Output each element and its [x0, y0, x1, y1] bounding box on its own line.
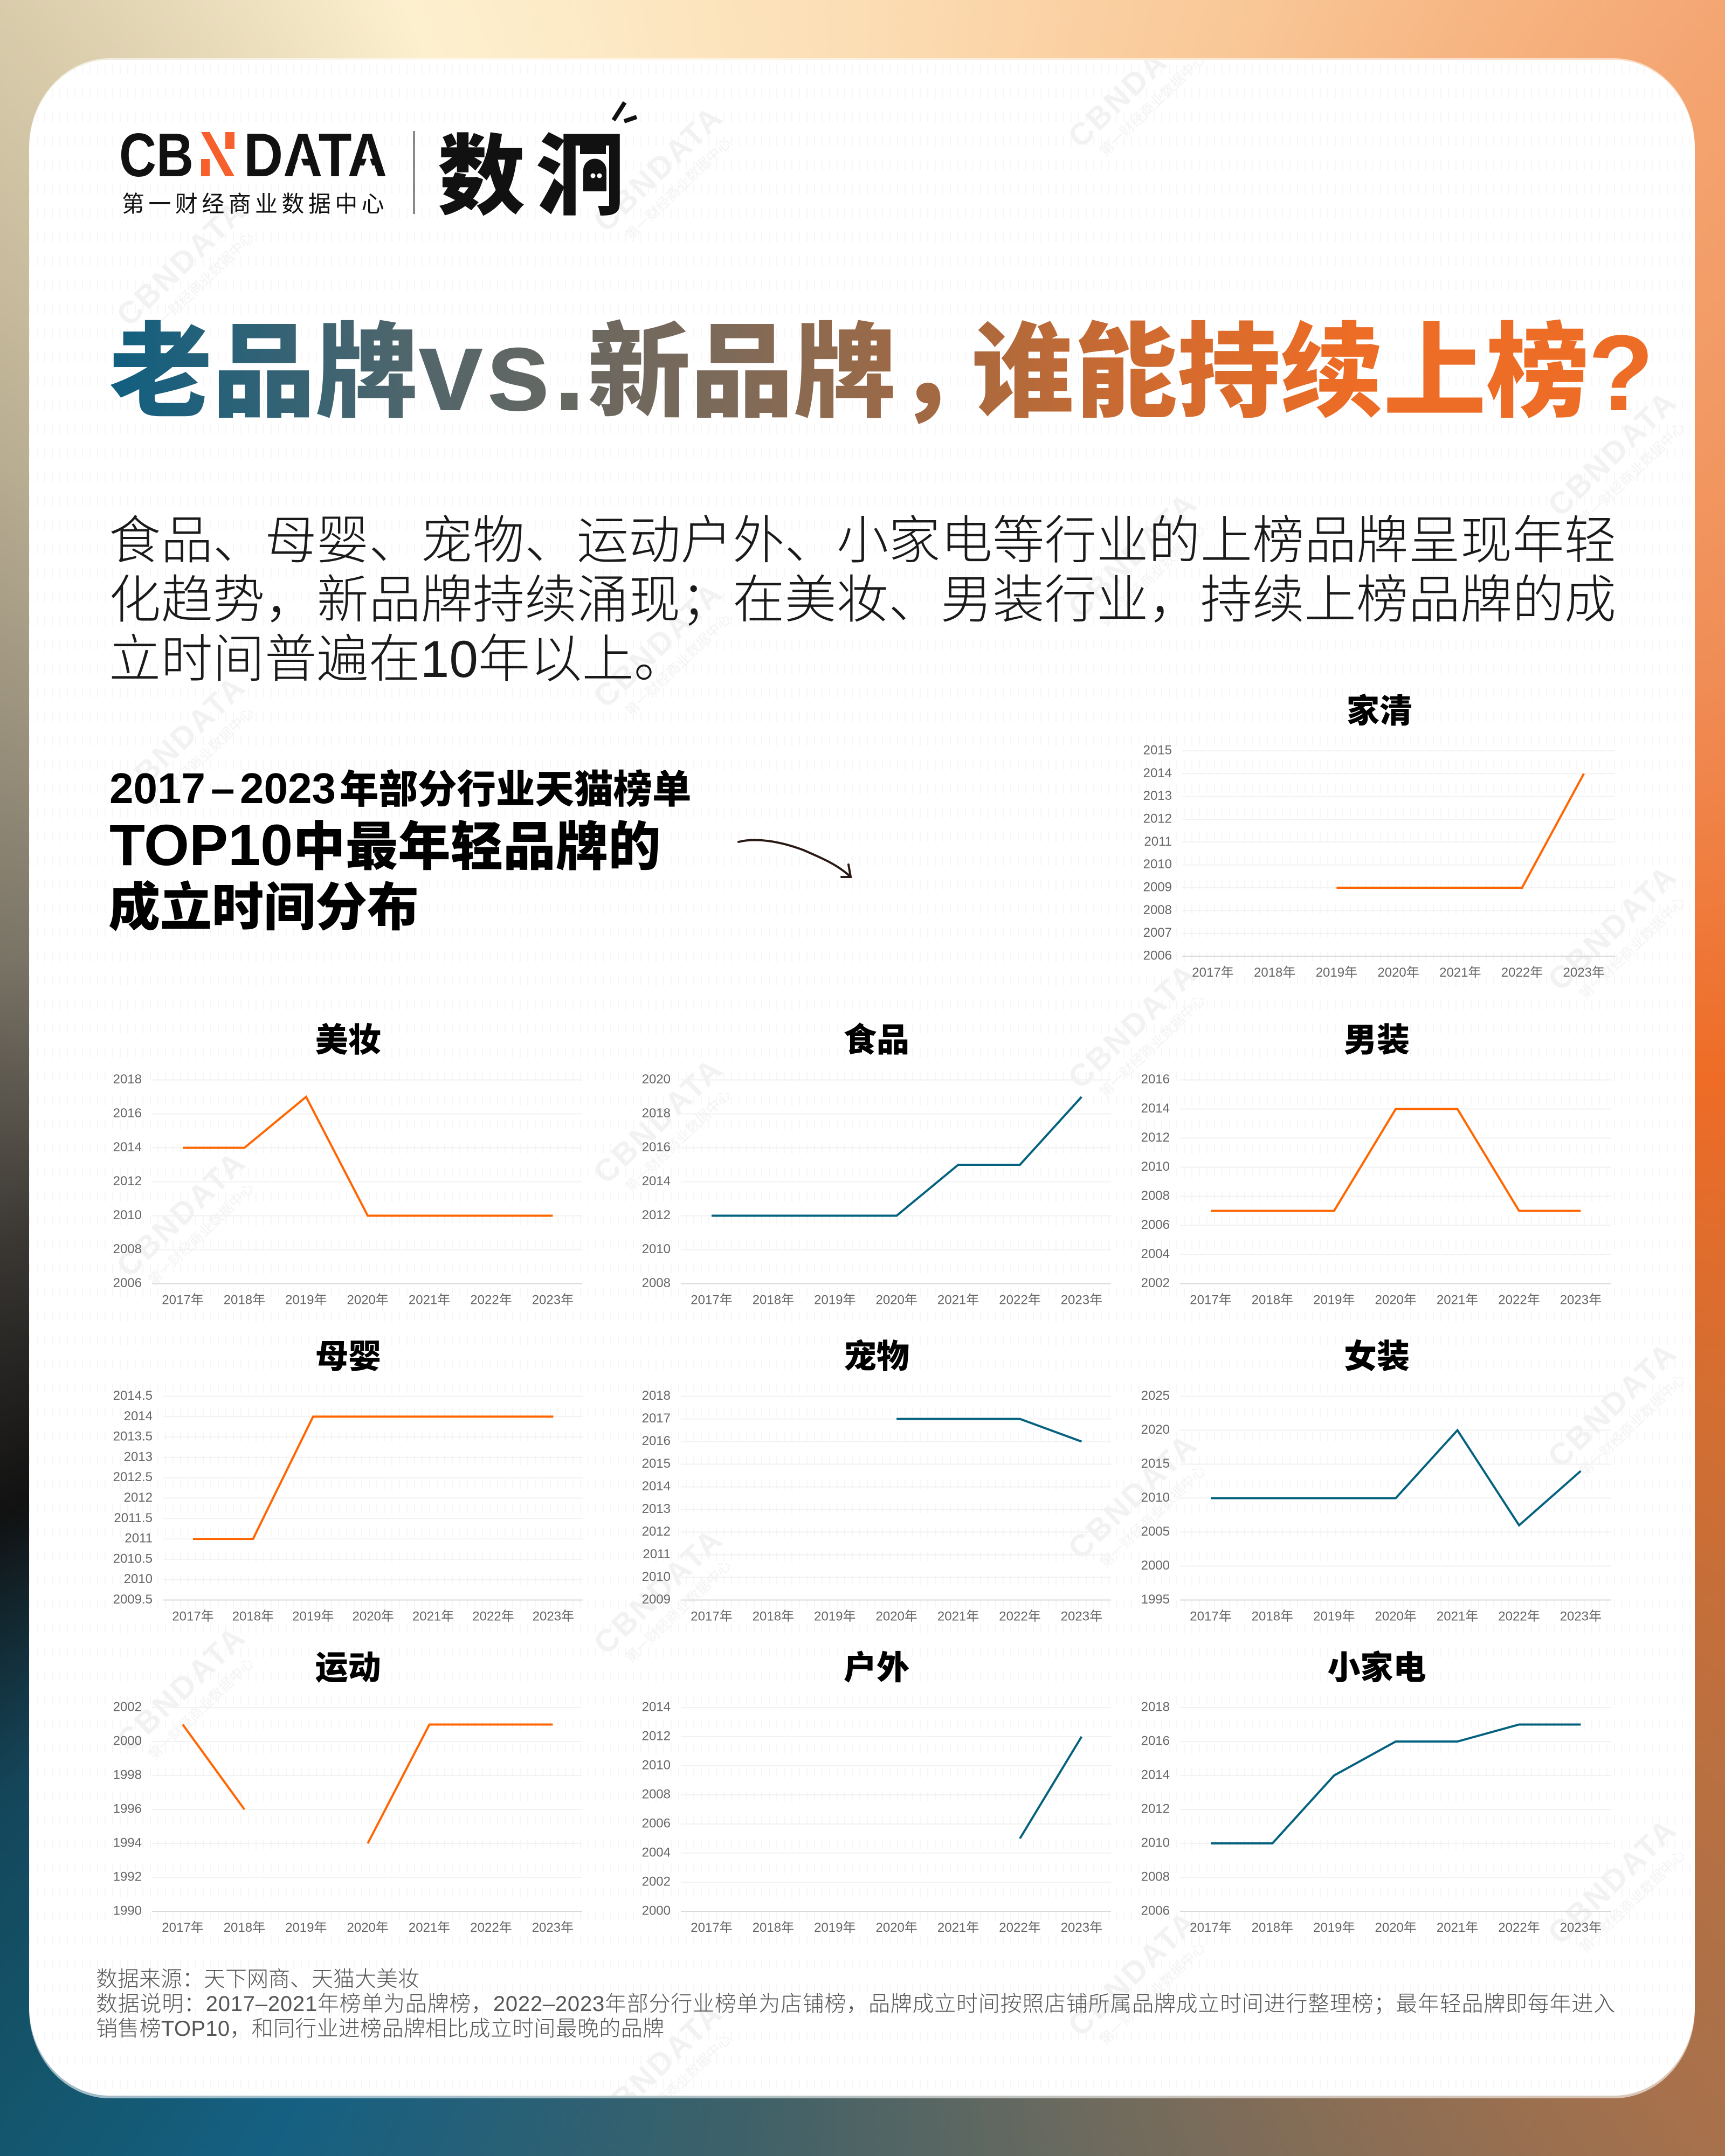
watermarks: 第一财经商业数据中心: [145, 229, 257, 338]
y axis labels: 2020: [642, 1072, 671, 1087]
x axis labels: 2019年: [285, 1920, 327, 1935]
x axis labels: 2019年: [285, 1293, 327, 1308]
y axis labels: 2010: [124, 1572, 153, 1586]
y axis labels: 2010: [642, 1570, 671, 1584]
y axis labels: [1143, 743, 1172, 963]
icon: ghost in doorway: [578, 146, 609, 206]
footnote: source and notes: 数据来源：天下网商、天猫大美妆: [96, 1967, 419, 1991]
y axis labels: 1998: [113, 1768, 142, 1782]
x axis labels: [691, 1293, 1102, 1308]
y axis labels: 2018: [1141, 1700, 1170, 1714]
y axis labels: 2009: [1143, 880, 1172, 895]
watermarks: CBNDATA: [1541, 1811, 1684, 1951]
x axis labels: 2019年: [1313, 1920, 1355, 1935]
y axis labels: [1141, 1700, 1170, 1918]
x axis labels: 2020年: [1375, 1920, 1417, 1935]
x axis labels: 2019年: [1313, 1609, 1355, 1623]
watermarks: 第一财经商业数据中心: [145, 1655, 257, 1764]
y axis labels: [642, 1072, 671, 1290]
x axis labels: 2020年: [1377, 965, 1419, 980]
x axis labels: 2023年: [1061, 1293, 1102, 1308]
icon: spark ticks: [613, 102, 637, 121]
x axis labels: 2017年: [691, 1920, 733, 1935]
section heading: –: [211, 764, 235, 812]
x axis labels: 2018年: [1252, 1293, 1293, 1308]
x axis labels: 2022年: [1498, 1920, 1540, 1935]
logo: 数洞: 洞: [536, 127, 625, 226]
x axis labels: 2021年: [1439, 965, 1481, 980]
x axis labels: 2019年: [1313, 1293, 1355, 1308]
watermarks: CBNDATA: [1061, 15, 1204, 155]
watermarks: CBNDATA: [1061, 485, 1204, 625]
y axis labels: 2018: [642, 1388, 671, 1403]
x axis labels: 2018年: [224, 1293, 265, 1308]
x axis labels: 2022年: [999, 1920, 1041, 1935]
y axis labels: 2012: [642, 1524, 671, 1539]
data line: [183, 1725, 553, 1843]
watermarks: CBNDATA: [110, 193, 253, 333]
y axis labels: 2014: [642, 1479, 671, 1494]
x axis labels: 2017年: [172, 1609, 214, 1623]
chart title: 家清: [1347, 693, 1412, 729]
x axis labels: 2023年: [1560, 1920, 1602, 1935]
y axis labels: [113, 1388, 153, 1607]
x axis labels: 2018年: [224, 1920, 265, 1935]
x axis labels: [1190, 1920, 1602, 1935]
watermarks: 第一财经商业数据中心: [145, 1180, 257, 1289]
intro paragraph: 食品、母婴、宠物、运动户外、小家电等行业的上榜品牌呈现年轻: [109, 512, 1616, 570]
y axis labels: [642, 1700, 671, 1918]
logo: CBNDATA with tagline: DATA: [244, 121, 387, 190]
y axis labels: 2013: [642, 1502, 671, 1516]
y axis labels: 2011: [1144, 834, 1172, 849]
x axis labels: [162, 1920, 574, 1935]
y axis labels: 2014: [1141, 1101, 1170, 1116]
title: 老品牌: [109, 315, 418, 430]
chart: 美妆: [113, 1022, 582, 1308]
data line: [193, 1416, 553, 1539]
title: vs.: [418, 305, 588, 435]
chart: 运动: [113, 1649, 582, 1935]
section heading: 2017: [109, 764, 205, 812]
y axis labels: 2007: [1143, 925, 1172, 940]
watermarks: 第一财经商业数据中心: [1096, 1462, 1209, 1571]
x axis labels: 2018年: [1252, 1920, 1293, 1935]
watermarks: 第一财经商业数据中心: [1096, 521, 1209, 630]
x axis labels: [172, 1609, 574, 1623]
chart title: 母婴: [315, 1338, 381, 1374]
y axis labels: 2014: [124, 1409, 153, 1423]
y axis labels: [1141, 1072, 1170, 1290]
watermarks: CBNDATA: [1061, 956, 1204, 1096]
watermarks: CBNDATA: [1061, 1903, 1204, 2043]
watermarks: CBNDATA: [587, 1051, 730, 1191]
logo: 数洞: [438, 102, 637, 226]
y axis labels: 2008: [1141, 1869, 1170, 1884]
watermarks: 第一财经商业数据中心: [622, 611, 734, 720]
x axis labels: 2022年: [999, 1293, 1041, 1308]
chart title: 美妆: [315, 1022, 381, 1059]
x axis labels: 2018年: [753, 1920, 794, 1935]
x axis labels: 2022年: [472, 1609, 514, 1623]
x axis labels: 2021年: [409, 1920, 450, 1935]
y axis labels: 2002: [642, 1875, 671, 1889]
watermarks: 第一财经商业数据中心: [1096, 51, 1209, 160]
watermarks: CBNDATA: [110, 1144, 253, 1284]
watermarks: CBNDATA: [587, 1995, 730, 2135]
y axis labels: 2009: [642, 1592, 671, 1607]
x axis labels: 2020年: [1375, 1293, 1417, 1308]
watermarks: 第一财经商业数据中心: [1576, 1371, 1688, 1480]
y axis labels: 1995: [1141, 1592, 1170, 1607]
x axis labels: 2017年: [1190, 1920, 1232, 1935]
chart: 小家电: [1141, 1649, 1611, 1935]
chart: 食品: [642, 1022, 1111, 1308]
y axis labels: 2014: [642, 1700, 671, 1714]
watermarks: CBNDATA: [587, 575, 730, 715]
y axis labels: [113, 1072, 142, 1290]
y axis labels: 1992: [113, 1869, 142, 1884]
x axis labels: 2017年: [162, 1293, 204, 1308]
y axis labels: 2020: [1141, 1422, 1170, 1437]
x axis labels: 2023年: [1061, 1920, 1102, 1935]
title: 新品牌: [588, 315, 896, 430]
x axis labels: 2019年: [814, 1609, 855, 1623]
logo: CBNDATA with tagline: CB: [119, 121, 194, 190]
x axis labels: 2021年: [937, 1293, 979, 1308]
x axis labels: 2020年: [347, 1920, 389, 1935]
chart title: 食品: [844, 1022, 909, 1059]
y axis labels: [113, 1700, 142, 1918]
watermarks: CBNDATA: [1541, 858, 1684, 998]
y axis labels: 2010: [1141, 1159, 1170, 1174]
y axis labels: 1994: [113, 1836, 142, 1850]
title: ?: [1588, 313, 1654, 433]
x axis labels: 2021年: [1437, 1920, 1478, 1935]
y axis labels: 2011.5: [114, 1511, 153, 1525]
logo divider: [413, 131, 415, 214]
y axis labels: 2006: [113, 1276, 142, 1290]
x axis labels: 2017年: [1192, 965, 1234, 980]
watermarks: 第一财经商业数据中心: [1096, 1939, 1209, 2048]
y axis labels: 2014: [642, 1174, 671, 1188]
y axis labels: 2010: [1143, 857, 1172, 872]
watermarks: CBNDATA: [1541, 1335, 1684, 1475]
y axis labels: 2010: [642, 1758, 671, 1772]
x axis labels: 2020年: [876, 1920, 917, 1935]
x axis labels: 2018年: [1252, 1609, 1293, 1623]
y axis labels: 2006: [1141, 1218, 1170, 1232]
x axis labels: 2023年: [532, 1920, 574, 1935]
watermarks: CBNDATA: [1541, 383, 1684, 523]
y axis labels: 2015: [642, 1456, 671, 1471]
x axis labels: 2020年: [347, 1293, 389, 1308]
data line: [183, 1097, 553, 1216]
x axis labels: [1192, 965, 1605, 980]
chart title: 女装: [1344, 1338, 1410, 1374]
x axis labels: 2017年: [691, 1609, 733, 1623]
chart title: 运动: [315, 1649, 381, 1686]
x axis labels: 2017年: [1190, 1609, 1232, 1623]
y axis labels: 2006: [1143, 949, 1172, 963]
chart title: 男装: [1344, 1022, 1410, 1059]
intro paragraph: 化趋势，新品牌持续涌现；在美妆、男装行业，持续上榜品牌的成: [109, 571, 1616, 629]
x axis labels: 2017年: [162, 1920, 204, 1935]
x axis labels: 2019年: [814, 1293, 855, 1308]
x axis labels: 2017年: [691, 1293, 733, 1308]
logo: CBNDATA with tagline: 第一财经商业数据中心: [122, 191, 388, 217]
y axis labels: 2010: [113, 1208, 142, 1222]
y axis labels: 2010.5: [113, 1551, 153, 1566]
y axis labels: 2016: [113, 1106, 142, 1121]
x axis labels: 2023年: [532, 1293, 574, 1308]
footnote: source and notes: 销售榜TOP10，和同行业进榜品牌相比成立时间最晚的品牌: [96, 2017, 664, 2041]
y axis labels: 2004: [642, 1846, 671, 1860]
x axis labels: 2021年: [1437, 1293, 1478, 1308]
y axis labels: 2010: [1141, 1836, 1170, 1850]
chart title: 小家电: [1327, 1649, 1426, 1686]
y axis labels: 1990: [113, 1904, 142, 1918]
x axis labels: 2019年: [1316, 965, 1357, 980]
x axis labels: 2018年: [753, 1609, 794, 1623]
y axis labels: 2005: [1141, 1524, 1170, 1539]
y axis labels: 2017: [642, 1411, 671, 1426]
x axis labels: [1190, 1609, 1602, 1623]
watermarks: 第一财经商业数据中心: [145, 704, 257, 813]
intro paragraph: [109, 512, 1616, 688]
y axis labels: 2016: [642, 1140, 671, 1155]
x axis labels: [1190, 1293, 1602, 1308]
section heading: 2023: [240, 764, 336, 812]
data line: [1336, 773, 1584, 888]
chart title: 宠物: [844, 1338, 909, 1374]
x axis labels: 2022年: [470, 1920, 512, 1935]
data line: [1211, 1725, 1581, 1843]
y axis labels: 2010: [1141, 1490, 1170, 1505]
x axis labels: 2020年: [353, 1609, 394, 1623]
data line: [896, 1419, 1081, 1441]
arrow: [739, 840, 851, 877]
section heading: TOP10中最年轻品牌的: [109, 812, 661, 877]
y axis labels: 2008: [642, 1276, 671, 1290]
y axis labels: 2012: [1141, 1130, 1170, 1145]
y axis labels: 2008: [1143, 903, 1172, 917]
y axis labels: 2006: [642, 1816, 671, 1830]
y axis labels: 2008: [1141, 1188, 1170, 1203]
y axis labels: 2000: [1141, 1558, 1170, 1573]
x axis labels: 2022年: [470, 1293, 512, 1308]
y axis labels: [642, 1388, 671, 1607]
watermarks: CBNDATA: [110, 668, 253, 808]
x axis labels: 2023年: [1560, 1609, 1602, 1623]
x axis labels: 2023年: [1563, 965, 1605, 980]
y axis labels: 2014: [1143, 766, 1172, 780]
x axis labels: 2021年: [409, 1293, 450, 1308]
y axis labels: 2004: [1141, 1247, 1170, 1261]
intro paragraph: 立时间普遍在10年以上。: [109, 631, 686, 688]
section heading: [108, 764, 691, 937]
data line: [712, 1097, 1081, 1216]
section heading: 成立时间分布: [108, 879, 419, 937]
y axis labels: [1141, 1388, 1170, 1607]
x axis labels: 2020年: [876, 1609, 917, 1623]
watermarks: CBNDATA: [1061, 1426, 1204, 1566]
y axis labels: 2002: [1141, 1276, 1170, 1290]
watermarks: 第一财经商业数据中心: [622, 135, 734, 244]
x axis labels: [691, 1920, 1102, 1935]
x axis labels: 2021年: [937, 1920, 979, 1935]
icon: orange N mark: [201, 132, 234, 176]
x axis labels: 2020年: [1375, 1609, 1417, 1623]
y axis labels: 2011: [125, 1531, 153, 1546]
y axis labels: 2012.5: [113, 1470, 153, 1484]
x axis labels: 2018年: [753, 1293, 794, 1308]
y axis labels: 2002: [113, 1700, 142, 1714]
y axis labels: 2014: [113, 1140, 142, 1155]
y axis labels: 2012: [642, 1729, 671, 1743]
y axis labels: 2000: [113, 1733, 142, 1749]
watermarks: 第一财经商业数据中心: [622, 1087, 734, 1196]
x axis labels: 2022年: [1498, 1293, 1540, 1308]
logo: CBNDATA with tagline: [119, 121, 388, 217]
y axis labels: 2013: [124, 1449, 153, 1464]
x axis labels: 2021年: [1437, 1609, 1478, 1623]
x axis labels: 2020年: [876, 1293, 917, 1308]
watermarks: CBNDATA: [110, 1619, 253, 1759]
chart: 家清: [1143, 693, 1615, 980]
data line: [1211, 1431, 1581, 1525]
x axis labels: [691, 1609, 1102, 1623]
y axis labels: 2012: [124, 1490, 153, 1505]
footnote: source and notes: [96, 1967, 1615, 2041]
y axis labels: 2014.5: [113, 1388, 153, 1403]
footnote: source and notes: 数据说明：2017–2021年榜单为品牌榜，2022–2023年部分行业榜单为店铺榜，品牌成立时间按照店铺所属品牌成立时间进行整理榜；最年轻品牌即每年进入: [96, 1992, 1615, 2016]
x axis labels: 2019年: [292, 1609, 334, 1623]
x axis labels: 2023年: [533, 1609, 574, 1623]
y axis labels: 2008: [642, 1787, 671, 1801]
x axis labels: 2018年: [232, 1609, 274, 1623]
x axis labels: 2022年: [999, 1609, 1041, 1623]
y axis labels: 2010: [642, 1242, 671, 1256]
title: ，: [896, 315, 999, 430]
y axis labels: 2018: [642, 1106, 671, 1121]
watermarks: CBNDATA: [587, 1521, 730, 1661]
logo: 数洞: 数: [438, 128, 525, 226]
y axis labels: 2015: [1143, 743, 1172, 758]
watermarks: 第一财经商业数据中心: [1576, 894, 1688, 1003]
y axis labels: 2014: [1141, 1768, 1170, 1782]
section heading: 年部分行业天猫榜单: [340, 768, 691, 812]
x axis labels: 2021年: [412, 1609, 454, 1623]
y axis labels: 2009.5: [113, 1592, 153, 1607]
x axis labels: 2022年: [1501, 965, 1543, 980]
watermarks: 第一财经商业数据中心: [1096, 992, 1209, 1101]
chart: 宠物: [642, 1338, 1111, 1623]
y axis labels: 2012: [113, 1174, 142, 1188]
y axis labels: 2008: [113, 1242, 142, 1256]
x axis labels: 2017年: [1190, 1293, 1232, 1308]
y axis labels: 2025: [1141, 1388, 1170, 1403]
y axis labels: 2016: [642, 1434, 671, 1448]
x axis labels: 2018年: [1254, 965, 1295, 980]
x axis labels: 2022年: [1498, 1609, 1540, 1623]
y axis labels: 2016: [1141, 1072, 1170, 1087]
y axis labels: 2006: [1141, 1904, 1170, 1918]
watermarks: CBNDATA: [587, 99, 730, 239]
x axis labels: [162, 1293, 574, 1308]
data line: [1020, 1737, 1081, 1839]
watermarks: 第一财经商业数据中心: [622, 2031, 734, 2140]
x axis labels: 2023年: [1061, 1609, 1102, 1623]
y axis labels: 2000: [642, 1904, 671, 1918]
x axis labels: 2023年: [1560, 1293, 1602, 1308]
chart: 女装: [1141, 1338, 1611, 1623]
y axis labels: 2011: [643, 1547, 671, 1561]
y axis labels: 2013.5: [113, 1429, 153, 1444]
y axis labels: 2015: [1141, 1456, 1170, 1471]
data line: [1211, 1109, 1581, 1211]
watermarks: 第一财经商业数据中心: [1576, 419, 1688, 528]
watermarks: 第一财经商业数据中心: [1576, 1847, 1688, 1956]
y axis labels: 2018: [113, 1072, 142, 1087]
chart: 男装: [1141, 1022, 1611, 1308]
y axis labels: 2013: [1143, 789, 1172, 803]
y axis labels: 2016: [1141, 1733, 1170, 1749]
y axis labels: 1996: [113, 1801, 142, 1816]
y axis labels: 2012: [642, 1208, 671, 1222]
chart: 母婴: [113, 1338, 583, 1623]
y axis labels: 2012: [1143, 812, 1172, 826]
title: 谁能持续上榜: [971, 315, 1589, 430]
watermarks: 第一财经商业数据中心: [622, 1557, 734, 1666]
chart: 户外: [642, 1649, 1111, 1935]
x axis labels: 2021年: [937, 1609, 979, 1623]
chart title: 户外: [844, 1649, 909, 1686]
y axis labels: 2012: [1141, 1801, 1170, 1816]
x axis labels: 2019年: [814, 1920, 855, 1935]
